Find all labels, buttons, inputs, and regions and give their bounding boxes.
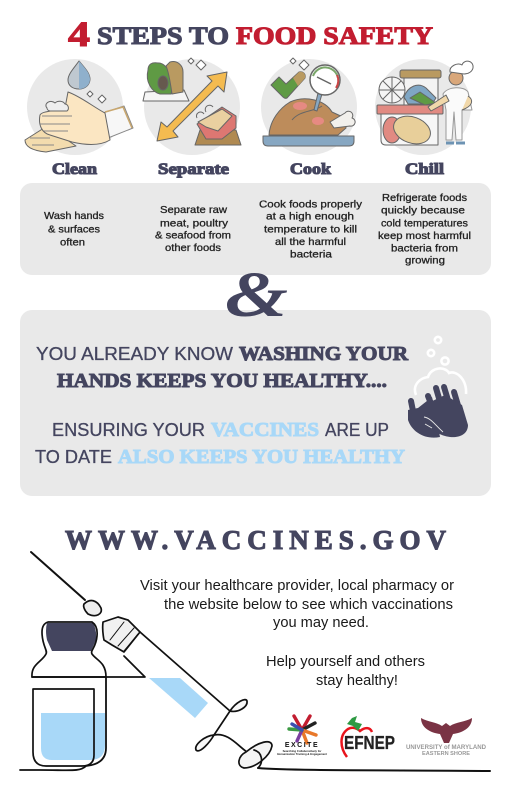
logo: EFNEP <box>342 716 395 757</box>
text: chill description: quickly because <box>381 204 465 216</box>
vial outline <box>32 622 106 677</box>
website heading: WWW.VACCINES.GOV <box>65 525 446 555</box>
text: washing hands message: WASHING YOUR <box>239 343 409 365</box>
logo: University of Maryland Eastern Shore: EASTERN SHORE <box>422 751 470 757</box>
step labels <box>52 161 445 178</box>
text: washing hands message: HANDS KEEPS YOU HEALTHY.... <box>57 370 387 392</box>
text: healthcare provider advice: Visit your healthcare provider, local pharmacy or <box>140 578 454 594</box>
text: healthcare provider advice <box>140 578 454 689</box>
text: healthcare provider advice: you may need. <box>273 615 369 631</box>
logo: EXCITE <box>277 716 327 756</box>
text: chill description: growing <box>405 254 445 266</box>
text: clean description <box>44 210 104 248</box>
text: chill description: Refrigerate foods <box>382 192 467 204</box>
text: healthcare provider advice: the website below to see which vaccinations <box>164 597 453 613</box>
step labels: Separate <box>158 161 229 178</box>
text: chill description: bacteria from <box>391 242 458 254</box>
illustration: vaccine vial and syringe <box>20 552 490 771</box>
text: cook description: bacteria <box>290 248 332 260</box>
step labels: Clean <box>52 161 97 178</box>
icon: soapy hands <box>408 337 468 438</box>
logo: EFNEP: EFNEP <box>344 733 395 753</box>
text: vaccines message: ARE UP <box>325 419 389 440</box>
text: vaccines message: ENSURING YOUR <box>52 419 205 440</box>
title: FOOD SAFETY <box>236 23 433 50</box>
icon: cook, roast turkey and thermometer <box>261 58 357 155</box>
text: separate description: other foods <box>165 242 221 254</box>
logo: University of Maryland Eastern Shore <box>406 718 487 757</box>
text: cook description: at a high enough <box>266 210 354 222</box>
text: chill description: cold temperatures <box>381 218 468 230</box>
text: healthcare provider advice: stay healthy! <box>316 673 398 689</box>
text: separate description: meat, poultry <box>160 218 229 230</box>
text: healthcare provider advice: Help yourself and others <box>266 654 425 670</box>
text: washing hands message <box>36 343 409 392</box>
syringe <box>31 552 85 600</box>
text: vaccines message: ALSO KEEPS YOU HEALTHY <box>118 446 406 468</box>
logo: EXCITE: EXCITE <box>285 742 319 749</box>
text: cook description: Cook foods properly <box>259 198 363 210</box>
icon: chill, chef and refrigerated food <box>375 59 473 155</box>
text: vaccines message <box>35 419 406 468</box>
text: chill description: keep most harmful <box>378 230 471 242</box>
panel: vaccination message <box>20 310 491 496</box>
logo: EXCITE: Immunization Training & Engagement <box>277 752 327 756</box>
text: separate description: Separate raw <box>160 204 227 216</box>
text: separate description <box>155 204 231 254</box>
text: washing hands message: YOU ALREADY KNOW <box>36 343 234 364</box>
text: vaccines message: VACCINES <box>211 419 319 441</box>
step labels: Chill <box>405 161 445 178</box>
text: clean description: often <box>60 236 85 248</box>
text: vaccines message: TO DATE <box>35 446 112 467</box>
icon: separate, cutting boards and arrow <box>143 58 241 155</box>
text: cook description: temperature to kill <box>264 224 357 236</box>
ampersand: & <box>225 259 288 331</box>
text: cook description <box>259 198 363 260</box>
title: 4 <box>68 14 90 54</box>
panel: step descriptions <box>20 183 491 275</box>
logo: EXCITE: Searching Collaboratively for <box>283 749 322 753</box>
text: clean description: & surfaces <box>48 224 100 236</box>
text: clean description: Wash hands <box>44 210 104 222</box>
icon: clean, washing hands <box>25 59 133 155</box>
text: chill description <box>378 192 471 266</box>
text: cook description: all the harmful <box>275 236 346 248</box>
title <box>68 14 433 54</box>
title: STEPS TO <box>97 23 229 50</box>
step labels: Cook <box>290 161 331 178</box>
text: separate description: & seafood from <box>155 230 231 242</box>
logo: University of Maryland Eastern Shore: UNIVERSITY of MARYLAND <box>406 745 487 751</box>
